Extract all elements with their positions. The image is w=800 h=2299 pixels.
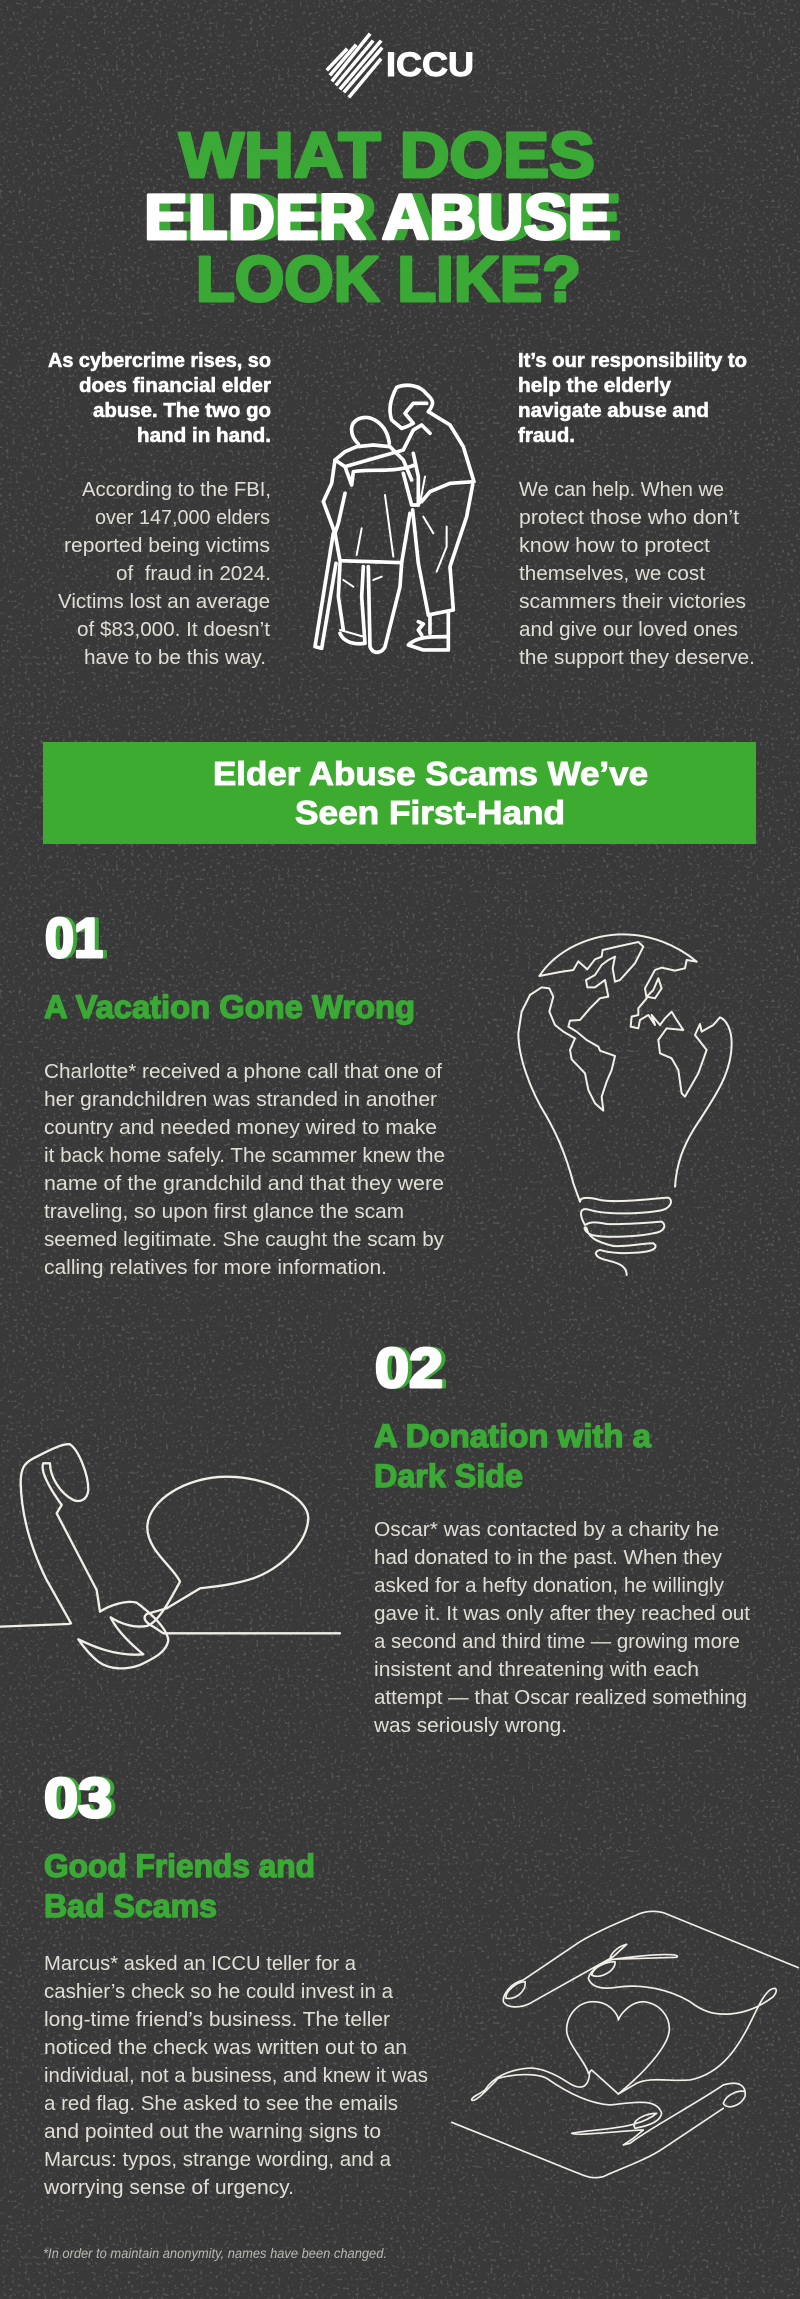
left intro body [58, 479, 271, 669]
case 03 heading: Good Friends and [44, 1848, 315, 1884]
case 03 body [43, 1953, 428, 2199]
case 02 number: 02 [379, 1336, 447, 1399]
left intro heading: As cybercrime rises, so [48, 350, 271, 372]
left intro body: over 147,000 elders [95, 507, 270, 529]
right intro body: and give our loved ones [519, 619, 738, 641]
case 03 body: Marcus* asked an ICCU teller for a [44, 1953, 357, 1975]
banner heading [213, 755, 648, 831]
right intro body [519, 479, 755, 669]
right intro heading: help the elderly [518, 375, 672, 397]
left intro heading: hand in hand. [137, 425, 271, 447]
case 01 number: 01 [45, 906, 103, 969]
left intro body: of fraud in 2024. [116, 563, 271, 585]
case 01 number: 01 [49, 906, 107, 969]
case 02 body [373, 1519, 750, 1737]
case 02 body: Oscar* was contacted by a charity he [374, 1519, 719, 1541]
case 02 body: attempt — that Oscar realized something [374, 1687, 747, 1709]
left intro body: According to the FBI, [82, 479, 271, 501]
title line 1: WHAT DOES [179, 119, 595, 191]
right intro body: themselves, we cost [519, 563, 705, 585]
case 03 heading: Bad Scams [44, 1888, 217, 1924]
case 03 body: long-time friend’s business. The teller [44, 2009, 390, 2031]
case 02 body: a second and third time — growing more [374, 1631, 740, 1653]
icon: globe light bulb [518, 934, 732, 1275]
banner heading: Seen First-Hand [295, 794, 565, 831]
case 02 body: was seriously wrong. [373, 1715, 567, 1737]
right intro heading: It’s our responsibility to [518, 350, 747, 372]
case 01 body: it back home safely. The scammer knew the [44, 1145, 445, 1167]
right intro heading: fraud. [518, 425, 575, 447]
right intro body: scammers their victories [519, 591, 746, 613]
case 01 body [44, 1061, 445, 1279]
case 01 body: traveling, so upon first glance the scam [44, 1201, 404, 1223]
case 03 body: Marcus: typos, strange wording, and a [44, 2149, 392, 2171]
title line 3: LOOK LIKE? [196, 243, 581, 315]
right intro body: know how to protect [519, 535, 710, 557]
icon: telephone and speech bubble [0, 1444, 340, 1668]
banner heading: Elder Abuse Scams We’ve [213, 755, 648, 792]
title [144, 119, 621, 315]
case 01 heading: A Vacation Gone Wrong [44, 989, 415, 1025]
case 01 body: calling relatives for more information. [44, 1257, 387, 1279]
left intro heading: does financial elder [79, 375, 271, 397]
case 01 body: name of the grandchild and that they were [44, 1173, 444, 1195]
case 02 number: 02 [375, 1336, 443, 1399]
case 01 body: her grandchildren was stranded in another [44, 1089, 437, 1111]
case 03 body: individual, not a business, and knew it was [44, 2065, 428, 2087]
case 03 heading [44, 1848, 315, 1924]
left intro body: Victims lost an average [58, 591, 270, 613]
right intro body: the support they deserve. [519, 647, 755, 669]
case 01 body: country and needed money wired to make [44, 1117, 437, 1139]
title line 2 shadow: ELDER ABUSE [155, 181, 621, 253]
banner [43, 742, 756, 844]
case 03 body: a red flag. She asked to see the emails [44, 2093, 398, 2115]
case 03 body: cashier’s check so he could invest in a [44, 1981, 394, 2003]
case 03 number: 03 [48, 1766, 116, 1829]
case 03 body: noticed the check was written out to an [44, 2037, 407, 2059]
footnote: *In order to maintain anonymity, names have been changed. [43, 2246, 387, 2261]
left intro body: of $83,000. It doesn’t [77, 619, 270, 641]
icon: hands holding heart [452, 1911, 798, 2178]
case 01 body: Charlotte* received a phone call that one of [44, 1061, 442, 1083]
case 03 body: worrying sense of urgency. [43, 2177, 294, 2199]
case 03 number: 03 [44, 1766, 112, 1829]
case 02 body: insistent and threatening with each [374, 1659, 699, 1681]
icon: logo stripes [328, 35, 381, 96]
right intro body: protect those who don’t [519, 507, 739, 529]
case 02 body: had donated to in the past. When they [374, 1547, 722, 1569]
left intro heading: abuse. The two go [93, 400, 271, 422]
right intro heading [518, 350, 747, 447]
left intro body: have to be this way. [84, 647, 266, 669]
logo: ICCU [328, 35, 474, 96]
case 02 body: asked for a hefty donation, he willingly [374, 1575, 724, 1597]
left intro heading [48, 350, 271, 447]
case 01 body: seemed legitimate. She caught the scam by [44, 1229, 444, 1251]
case 03 body: and pointed out the warning signs to [44, 2121, 381, 2143]
left intro body: reported being victims [64, 535, 270, 557]
right intro heading: navigate abuse and [518, 400, 709, 422]
case 02 heading [374, 1418, 651, 1494]
title line 2: ELDER ABUSE [144, 181, 611, 253]
right intro body: We can help. When we [519, 479, 724, 501]
case 02 heading: A Donation with a [374, 1418, 651, 1454]
icon: elderly couple [315, 385, 474, 652]
case 02 heading: Dark Side [374, 1458, 523, 1494]
case 02 body: gave it. It was only after they reached out [374, 1603, 750, 1625]
logo wordmark: ICCU [386, 46, 474, 84]
